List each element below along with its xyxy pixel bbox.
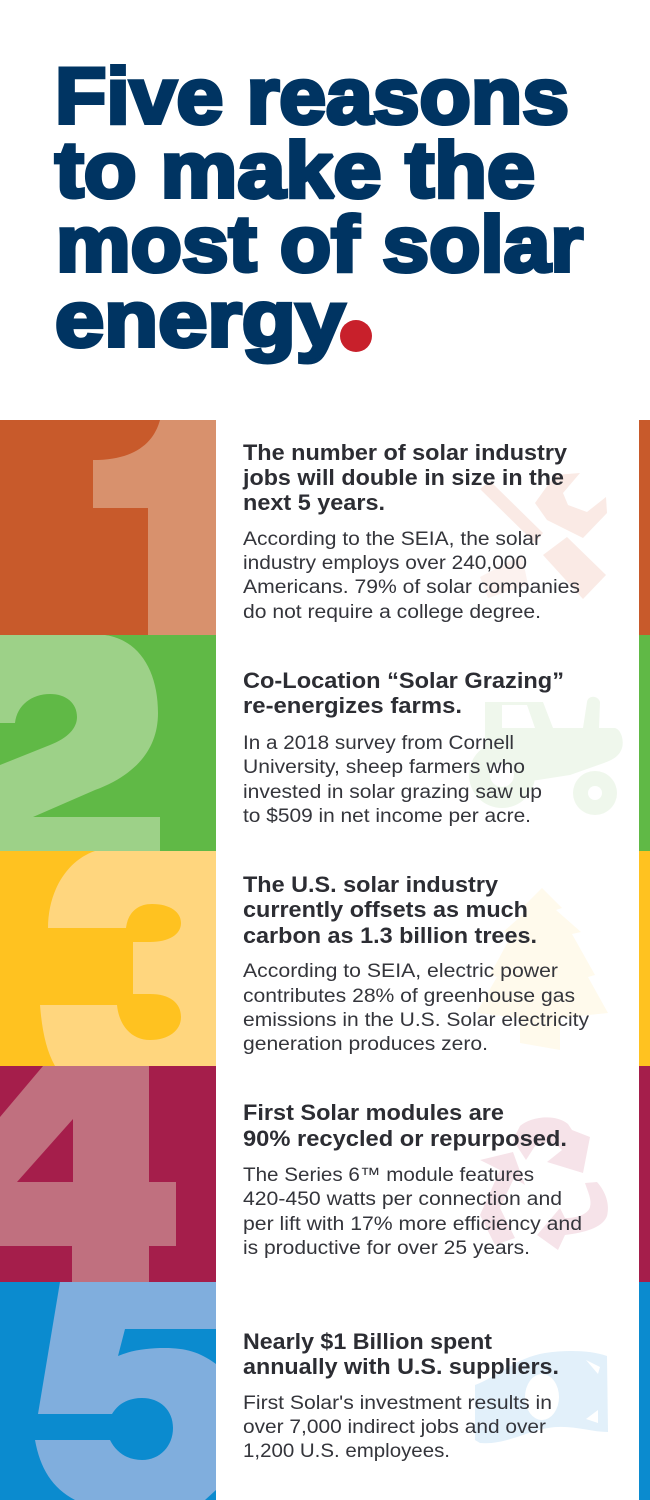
text block: reason 1: jobs will double in size in the bbox=[242, 465, 564, 490]
icon: pine tree bbox=[476, 888, 608, 1050]
text block: reason 3: emissions in the U.S. Solar electricity bbox=[243, 1010, 589, 1031]
panel: number 2 block bbox=[0, 635, 216, 851]
text block: reason 2: re-energizes farms. bbox=[243, 693, 462, 718]
text block: reason 4: 90% recycled or repurposed. bbox=[243, 1126, 567, 1151]
text block: reason 4: First Solar modules are bbox=[243, 1100, 504, 1125]
text block: reason 5: First Solar's investment results in bbox=[243, 1393, 552, 1414]
text block: reason 4: per lift with 17% more efficiency and bbox=[243, 1214, 582, 1235]
text block: reason 1 bbox=[242, 440, 580, 623]
text block: reason 4: is productive for over 25 years. bbox=[243, 1238, 530, 1259]
panel: number 1 block bbox=[0, 420, 216, 635]
text block: reason 3: carbon as 1.3 billion trees. bbox=[243, 923, 537, 948]
text block: reason 3: currently offsets as much bbox=[243, 897, 528, 922]
text block: reason 2: University, sheep farmers who bbox=[243, 757, 525, 778]
text block: reason 1: Americans. 79% of solar companies bbox=[243, 577, 580, 598]
title: most of solar bbox=[56, 199, 583, 288]
text block: reason 1: The number of solar industry bbox=[243, 440, 567, 465]
text block: reason 2: In a 2018 survey from Cornell bbox=[243, 733, 514, 754]
icon: recycling arrows bbox=[480, 1117, 608, 1250]
text block: reason 3: generation produces zero. bbox=[243, 1034, 488, 1055]
text block: reason 1: next 5 years. bbox=[243, 490, 385, 515]
title: to make the bbox=[55, 125, 535, 214]
text block: reason 5 bbox=[243, 1329, 559, 1462]
text block: reason 4: The Series 6™ module features bbox=[243, 1165, 534, 1186]
panel: number 4 block bbox=[0, 1066, 216, 1282]
panel: number 5 block bbox=[0, 1282, 216, 1500]
text block: reason 2: Co-Location “Solar Grazing” bbox=[243, 668, 564, 693]
text block: reason 2 bbox=[243, 668, 564, 827]
text block: reason 5: annually with U.S. suppliers. bbox=[243, 1354, 559, 1379]
icon: tractor bbox=[469, 697, 623, 815]
icon: banknote bbox=[475, 1351, 608, 1443]
text block: reason 4: 420-450 watts per connection and bbox=[243, 1189, 562, 1210]
text block: reason 2: invested in solar grazing saw up bbox=[243, 782, 542, 803]
icon: wrench and screwdriver bbox=[480, 473, 607, 599]
text block: reason 5: over 7,000 indirect jobs and over bbox=[243, 1417, 547, 1438]
text block: reason 4 bbox=[243, 1100, 582, 1259]
text block: reason 3: According to SEIA, electric power bbox=[243, 961, 559, 982]
text block: reason 5: 1,200 U.S. employees. bbox=[243, 1441, 450, 1462]
title bbox=[55, 51, 583, 363]
text block: reason 2: to $509 in net income per acre. bbox=[243, 806, 531, 827]
text block: reason 1: do not require a college degree. bbox=[243, 602, 541, 623]
title: Five reasons bbox=[55, 51, 569, 140]
text block: reason 1: According to the SEIA, the solar bbox=[243, 529, 542, 550]
text block: reason 3: The U.S. solar industry bbox=[243, 872, 498, 897]
text block: reason 1: industry employs over 240,000 bbox=[243, 553, 527, 574]
title: energy bbox=[55, 274, 345, 363]
right edge colour bars bbox=[639, 420, 650, 1500]
panel: number 3 block bbox=[0, 851, 216, 1066]
text block: reason 5: Nearly $1 Billion spent bbox=[243, 1329, 493, 1354]
text block: reason 3 bbox=[243, 872, 589, 1055]
text block: reason 3: contributes 28% of greenhouse gas bbox=[243, 986, 575, 1007]
